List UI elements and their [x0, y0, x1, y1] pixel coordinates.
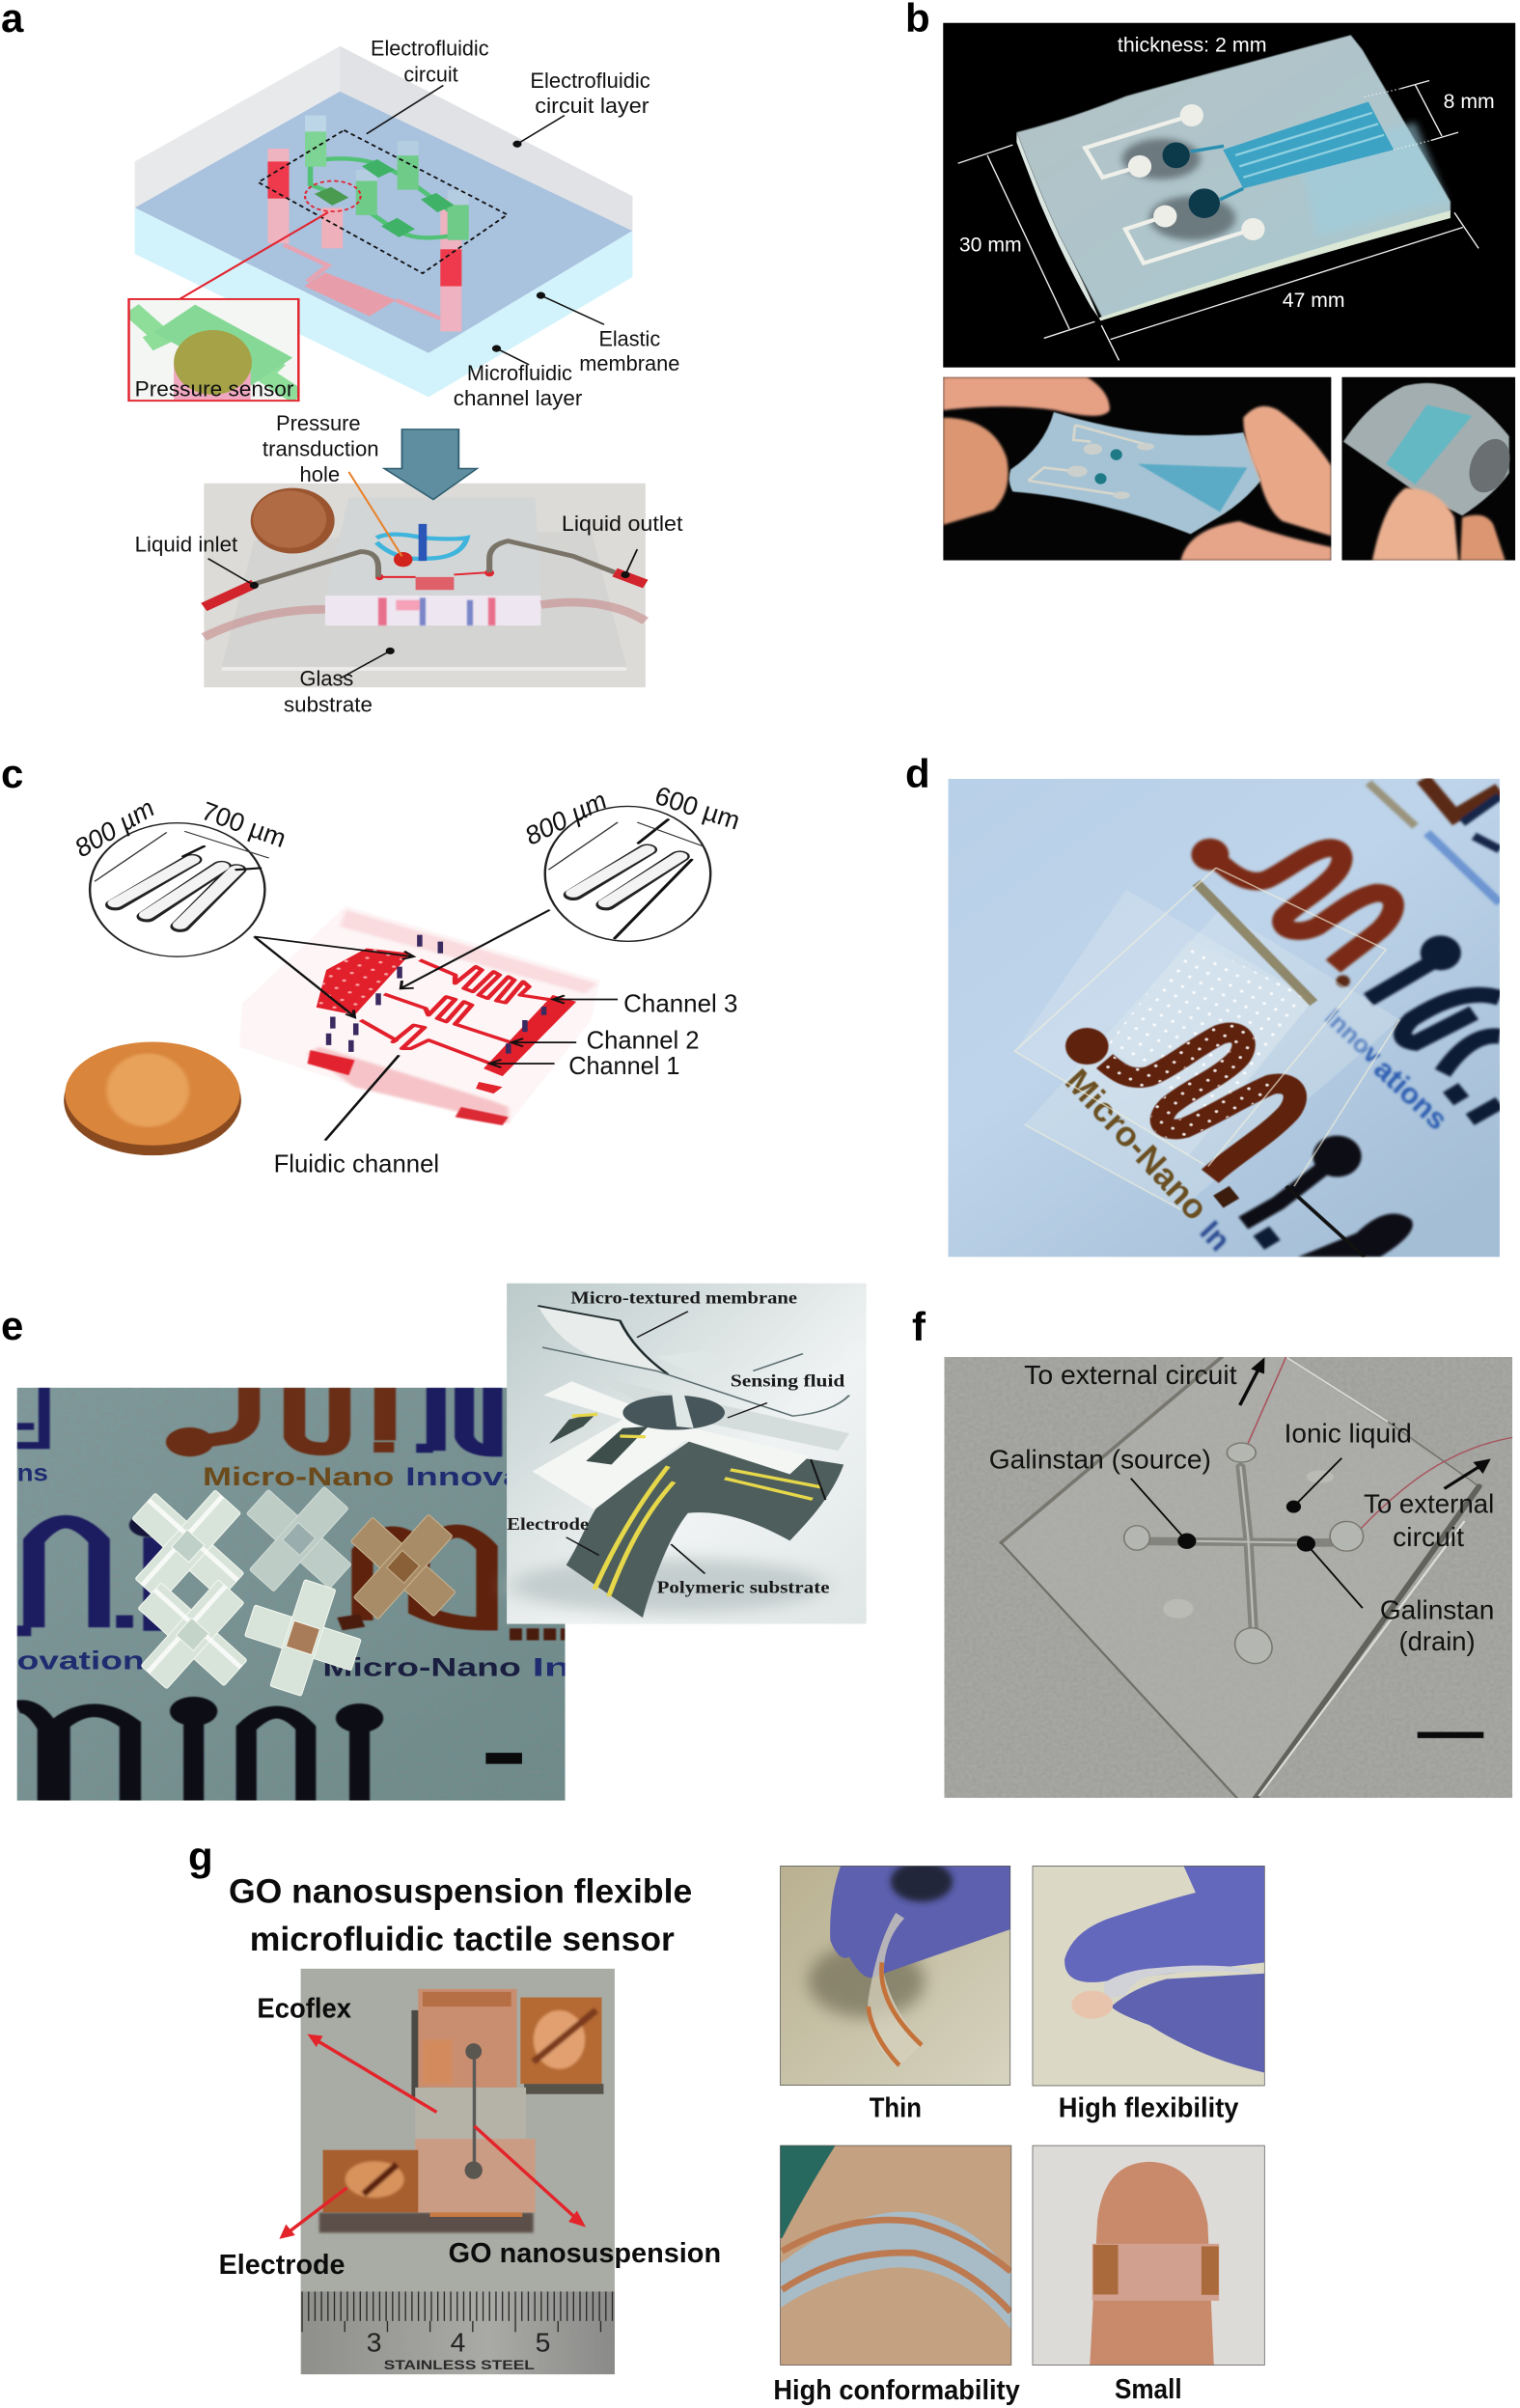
- photo of assembled device: [204, 484, 646, 687]
- photo: [949, 779, 1500, 1258]
- photo: high conformability: [780, 2145, 1011, 2366]
- panel g: property photos: [773, 1862, 1265, 2405]
- dark stains: [1122, 139, 1201, 180]
- panel c drawing: Channel 1: [568, 1052, 679, 1080]
- panel c drawing: Channel 3: [623, 989, 737, 1017]
- labels of panel a: circuit layer: [535, 95, 649, 118]
- panel c drawing: [64, 781, 743, 1177]
- sensor drawing: Electrode: [219, 2250, 345, 2281]
- blue circuit: [376, 535, 467, 559]
- panel c drawing: Channel 2: [587, 1026, 700, 1054]
- label g: g: [188, 1834, 213, 1879]
- labels of panel a: Electrofluidic: [530, 69, 650, 93]
- cross channel: [1139, 1467, 1332, 1638]
- penny: [251, 488, 335, 553]
- photo: Galinstan (source): [989, 1446, 1211, 1475]
- white electrodes: [1085, 115, 1253, 263]
- label d: d: [905, 751, 930, 796]
- labels of panel a: transduction: [263, 437, 379, 461]
- dimension labels: [69, 781, 743, 863]
- blue serpentine channel: [1191, 146, 1243, 200]
- panel b photos: [943, 23, 1517, 561]
- inset schematic: Sensing fluid: [731, 1371, 845, 1391]
- top photo with dimensions: thickness: 2 mm: [1118, 33, 1267, 56]
- red serpentine channels: [361, 960, 553, 1064]
- top photo with dimensions: 30 mm: [959, 233, 1022, 256]
- printed text: ns: [17, 1460, 48, 1487]
- cross sensors: [103, 1460, 483, 1716]
- inset schematic: Electrode: [507, 1514, 589, 1534]
- white cross layer: [532, 1381, 810, 1509]
- property labels: High conformability: [773, 2374, 1020, 2405]
- stretched device photo: [943, 376, 1332, 561]
- labels of panel a: Microfluidic: [467, 362, 572, 385]
- micro-textured membrane: [538, 1306, 668, 1374]
- device block: [239, 906, 600, 1125]
- dimension labels: 700 µm: [198, 796, 290, 853]
- panel e drawing: [17, 1284, 867, 1801]
- labels of panel a: Electrofluidic: [371, 37, 489, 61]
- photo: (drain): [1398, 1627, 1476, 1657]
- label c: c: [1, 751, 23, 796]
- tubes: [204, 584, 254, 607]
- photo: To external: [1364, 1490, 1494, 1519]
- printed text: Micro-Nano: [203, 1462, 394, 1491]
- labels of panel a: Elastic: [598, 328, 660, 351]
- top photo with dimensions: 47 mm: [1283, 288, 1345, 312]
- printed text: [17, 1460, 596, 1681]
- penny: [64, 1041, 241, 1155]
- red pillars: [267, 149, 461, 331]
- property labels: Thin: [870, 2092, 922, 2123]
- title: microfluidic tactile sensor: [250, 1921, 675, 1958]
- red arrows: [279, 2034, 586, 2239]
- panel b: stretchable device photos: [905, 0, 1517, 561]
- labels of panel a: membrane: [579, 352, 679, 375]
- labels of panel a: Pressure: [276, 412, 361, 435]
- rolled device photo: [1341, 376, 1515, 561]
- panel g: GO nanosuspension sensor, left part: [188, 1834, 721, 2374]
- chip layers: [1014, 890, 1313, 1156]
- labels of panel a: Liquid inlet: [135, 533, 237, 557]
- panel a: electrofluidic pressure sensor: [1, 0, 682, 717]
- printed text: Micro-Nano: [322, 1652, 521, 1681]
- black markers: [1131, 1358, 1490, 1608]
- label f: f: [912, 1304, 926, 1349]
- labels of panel a: Liquid outlet: [562, 512, 682, 536]
- dimension labels: 800 µm: [69, 793, 159, 863]
- title: [229, 1873, 692, 1958]
- photo: [944, 1357, 1512, 1798]
- sensor drawing: GO nanosuspension: [449, 2238, 721, 2269]
- sensor photo: 5: [536, 2327, 550, 2357]
- photo: In: [1194, 1214, 1237, 1258]
- leader lines: [208, 85, 637, 678]
- photo: Innov: [1319, 1004, 1387, 1069]
- panel c drawing: Fluidic channel: [274, 1150, 439, 1177]
- blue arrow: [384, 429, 477, 500]
- top photo with dimensions: 8 mm: [1444, 89, 1495, 113]
- labels of panel a: substrate: [284, 693, 373, 717]
- left zoom circle: [90, 823, 269, 956]
- droplets: [1124, 1443, 1364, 1668]
- sensor drawing: [219, 1873, 721, 2374]
- panel c: three-channel device: [1, 751, 743, 1177]
- panel e: cross-shaped sensors: [1, 1284, 867, 1801]
- labels of panel a: circuit: [403, 64, 458, 87]
- labels of panel a: hole: [300, 463, 340, 486]
- photo: high flexibility: [1033, 1866, 1265, 2087]
- photo: circuit: [1393, 1523, 1465, 1552]
- curved substrate: [567, 1440, 843, 1618]
- photo: To external circuit: [1024, 1361, 1237, 1390]
- inset schematic: Polymeric substrate: [657, 1578, 830, 1597]
- printed top pattern: [17, 1388, 566, 1801]
- scale bar: [485, 1753, 522, 1764]
- photo: small: [1033, 2145, 1265, 2366]
- sensor photo: STAINLESS STEEL: [384, 2358, 535, 2372]
- labels of panel a: Glass: [300, 667, 353, 690]
- sensor drawing: Ecoflex: [257, 1994, 351, 2024]
- sensor photo: 4: [451, 2327, 465, 2357]
- photo of sensors on printed logo: [17, 1388, 596, 1801]
- photo: Ionic liquid: [1285, 1420, 1412, 1449]
- vias: [329, 935, 544, 1054]
- sensor photo: 3: [367, 2327, 381, 2357]
- printed text: Innovat: [405, 1462, 536, 1491]
- panel f: galinstan cross channel: [912, 1304, 1512, 1798]
- property labels: Small: [1115, 2373, 1182, 2404]
- labels of panel a: [135, 37, 682, 717]
- inset schematic: Micro-textured membrane: [570, 1288, 797, 1308]
- arrows and channel labels: [254, 910, 618, 1141]
- photo: Micro-Nano: [1058, 1062, 1215, 1228]
- photo: thin: [780, 1866, 1011, 2086]
- pressure sensor inset: Pressure sensor: [135, 377, 293, 401]
- property labels: High flexibility: [1059, 2092, 1239, 2123]
- dashed circuit outline: [259, 130, 508, 273]
- dimension labels: 800 µm: [520, 786, 611, 851]
- pressure sensor inset: [129, 212, 328, 401]
- photo: ations: [1368, 1051, 1454, 1136]
- sensor photo: [301, 1969, 615, 2374]
- dimension lines: [958, 80, 1479, 360]
- panel a drawing: [129, 37, 682, 717]
- photo: Galinstan: [1380, 1596, 1494, 1625]
- panel d: transparent chip on printed logo: [905, 751, 1500, 1258]
- dimension labels: 600 µm: [651, 781, 743, 836]
- printed text: Inn: [532, 1652, 596, 1681]
- inset schematic: [507, 1284, 867, 1624]
- red reservoir: [317, 949, 411, 1015]
- printed text: ovation: [17, 1646, 145, 1675]
- property labels: [773, 2092, 1239, 2405]
- title: GO nanosuspension flexible: [229, 1873, 692, 1911]
- ruler: [301, 2291, 615, 2374]
- exploded schematic block: [135, 46, 632, 397]
- label e: e: [1, 1303, 23, 1348]
- top photo with dimensions: [943, 23, 1515, 368]
- labels of panel a: channel layer: [454, 387, 582, 410]
- right zoom circle: [545, 806, 710, 941]
- green electrofluidic circuit: [305, 116, 469, 240]
